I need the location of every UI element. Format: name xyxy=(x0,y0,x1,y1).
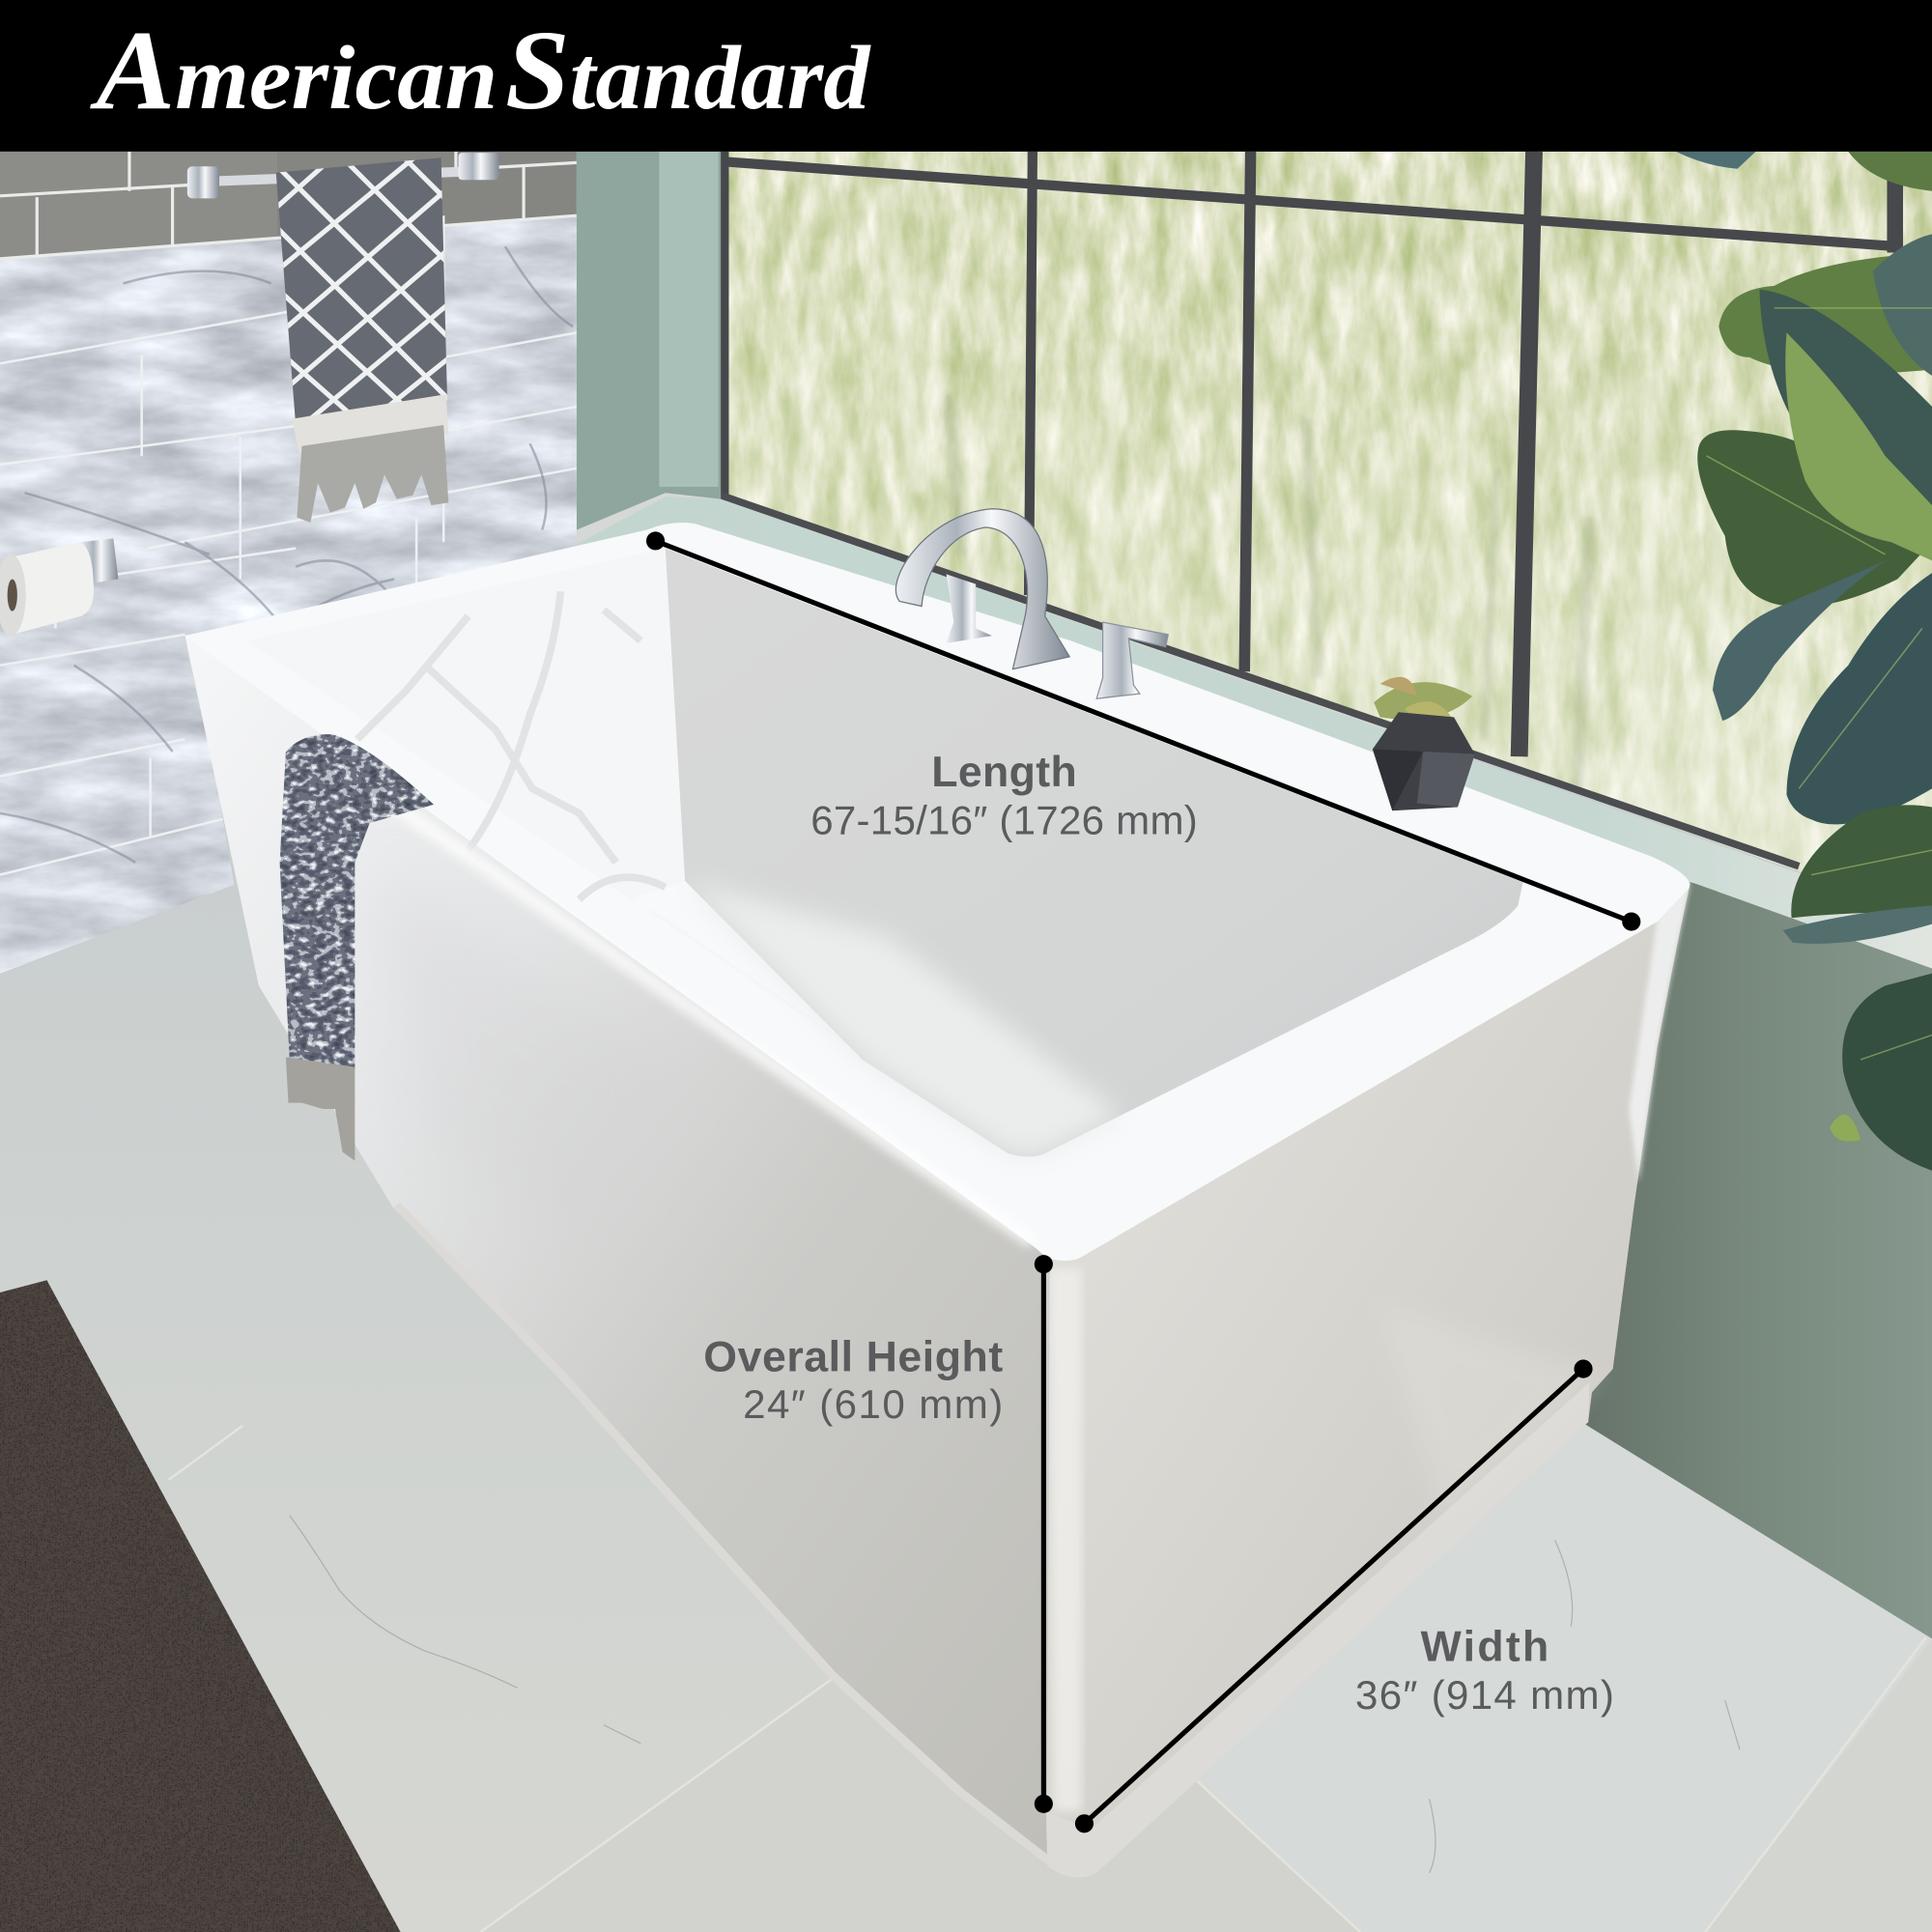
back wall of basin xyxy=(666,549,1523,1156)
succulent and geometric pot xyxy=(1373,677,1475,810)
logo wordmark xyxy=(89,8,871,133)
hanging towel xyxy=(276,158,448,523)
overall height dimension line xyxy=(1035,1255,1053,1813)
glass accent tile band xyxy=(0,152,577,259)
marble wall tiles xyxy=(0,152,577,989)
forest window view xyxy=(721,152,1932,927)
long side bottom lip xyxy=(397,1205,1050,1861)
rim xyxy=(185,523,1690,1261)
logo wordmark: Standard xyxy=(505,8,871,133)
length label: Length xyxy=(931,749,1077,796)
logo wordmark: American xyxy=(89,8,497,133)
black header band xyxy=(0,0,1932,152)
length dimension line xyxy=(646,531,1640,931)
faint rim highlights on the long side xyxy=(370,788,1033,1242)
width dimension line xyxy=(1075,1360,1593,1833)
window frame xyxy=(717,152,1897,867)
green wall xyxy=(1583,863,1932,1638)
basin reflections xyxy=(357,591,666,899)
width label: 36″ (914 mm) xyxy=(1355,1672,1614,1718)
toilet paper holder xyxy=(0,538,118,636)
overall height label xyxy=(703,1334,1003,1427)
width label: Width xyxy=(1421,1623,1548,1670)
towel bar xyxy=(187,153,499,198)
basin left interior xyxy=(246,549,1008,1153)
overall height label: 24″ (610 mm) xyxy=(743,1381,1003,1427)
overall height label: Overall Height xyxy=(703,1334,1003,1381)
length label xyxy=(810,749,1198,843)
base plinth xyxy=(1046,1382,1589,1878)
width label xyxy=(1355,1623,1614,1718)
fiddle-leaf plant xyxy=(1676,152,1932,1171)
draped towel on tub xyxy=(273,727,440,1161)
rug xyxy=(0,1269,407,1932)
floor xyxy=(0,739,1932,1932)
faucet set xyxy=(895,509,1168,698)
long side panel xyxy=(185,635,1050,1865)
length label: 67-15/16″ (1726 mm) xyxy=(810,798,1198,843)
end panel xyxy=(1047,882,1690,1878)
bathtub xyxy=(185,523,1690,1878)
window alcove side wall and sill xyxy=(569,152,1932,969)
